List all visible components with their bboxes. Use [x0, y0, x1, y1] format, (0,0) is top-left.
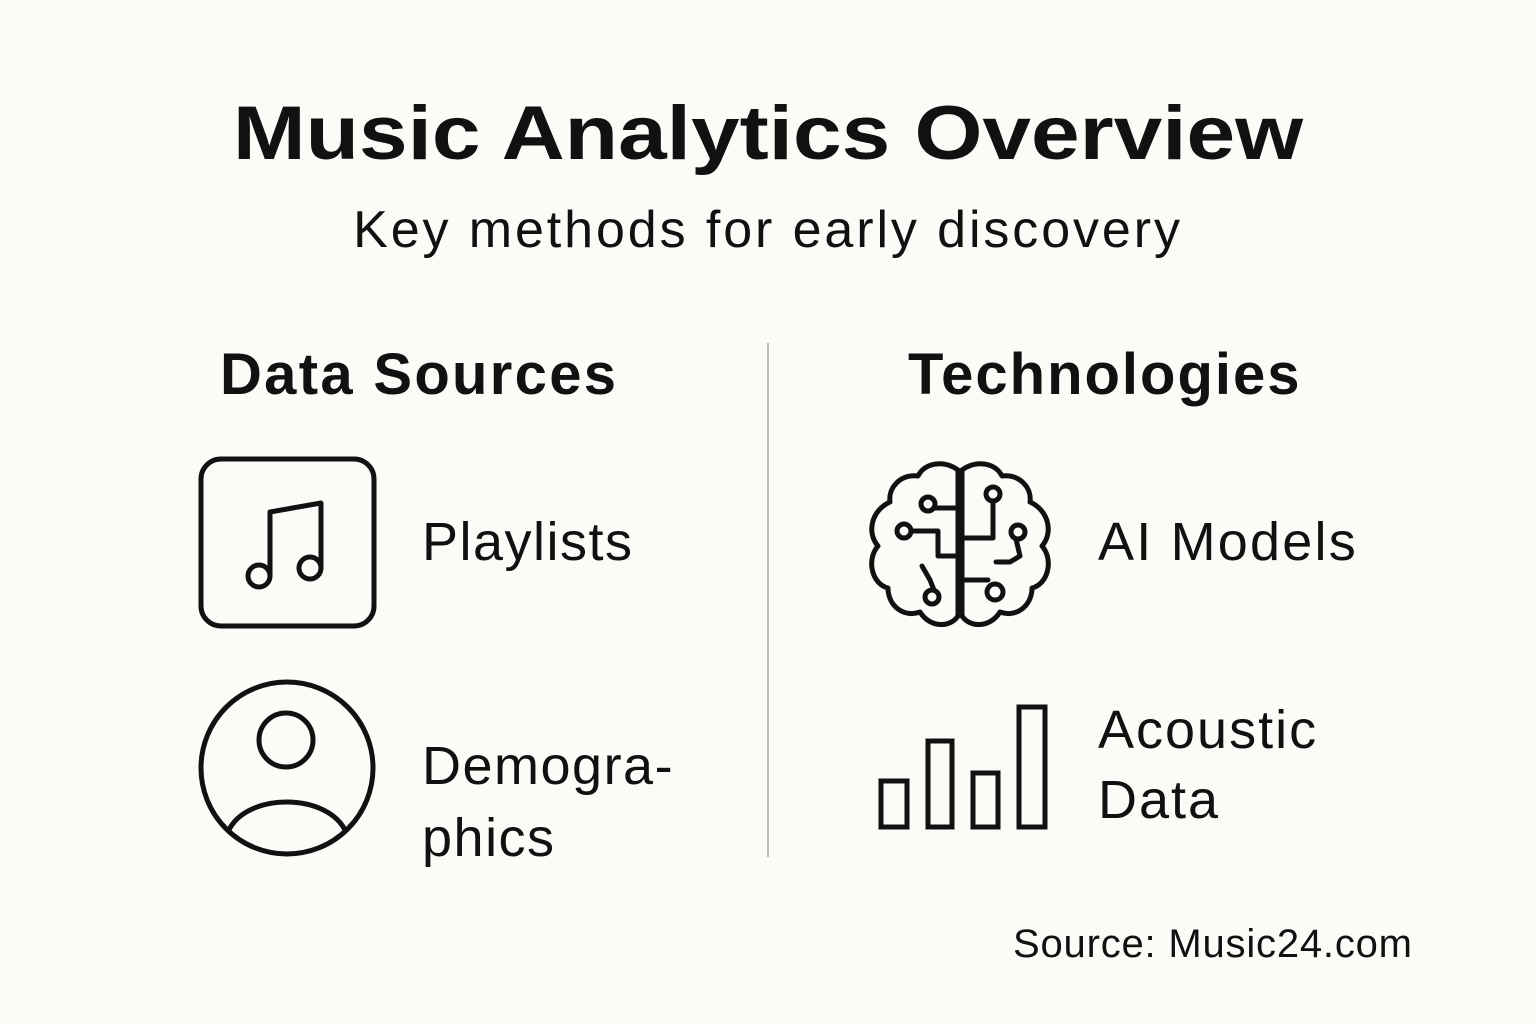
label: playlists: Playlists: [422, 512, 634, 572]
label: demographics: Demogra-: [422, 736, 674, 796]
source: Source: Music24.com: [1013, 922, 1413, 966]
label: demographics: phics: [422, 808, 556, 868]
label: acoustic data: [1098, 700, 1318, 830]
divider: [767, 343, 769, 857]
label: ai models: AI Models: [1098, 512, 1358, 572]
label: acoustic data: Acoustic: [1098, 700, 1318, 760]
heading: data sources: Data Sources: [220, 342, 618, 407]
heading: technologies: Technologies: [908, 342, 1302, 407]
subtitle: Key methods for early discovery: [353, 201, 1183, 259]
title: Music Analytics Overview: [233, 91, 1303, 176]
label: acoustic data: Data: [1098, 770, 1220, 830]
label: demographics: [422, 736, 674, 868]
